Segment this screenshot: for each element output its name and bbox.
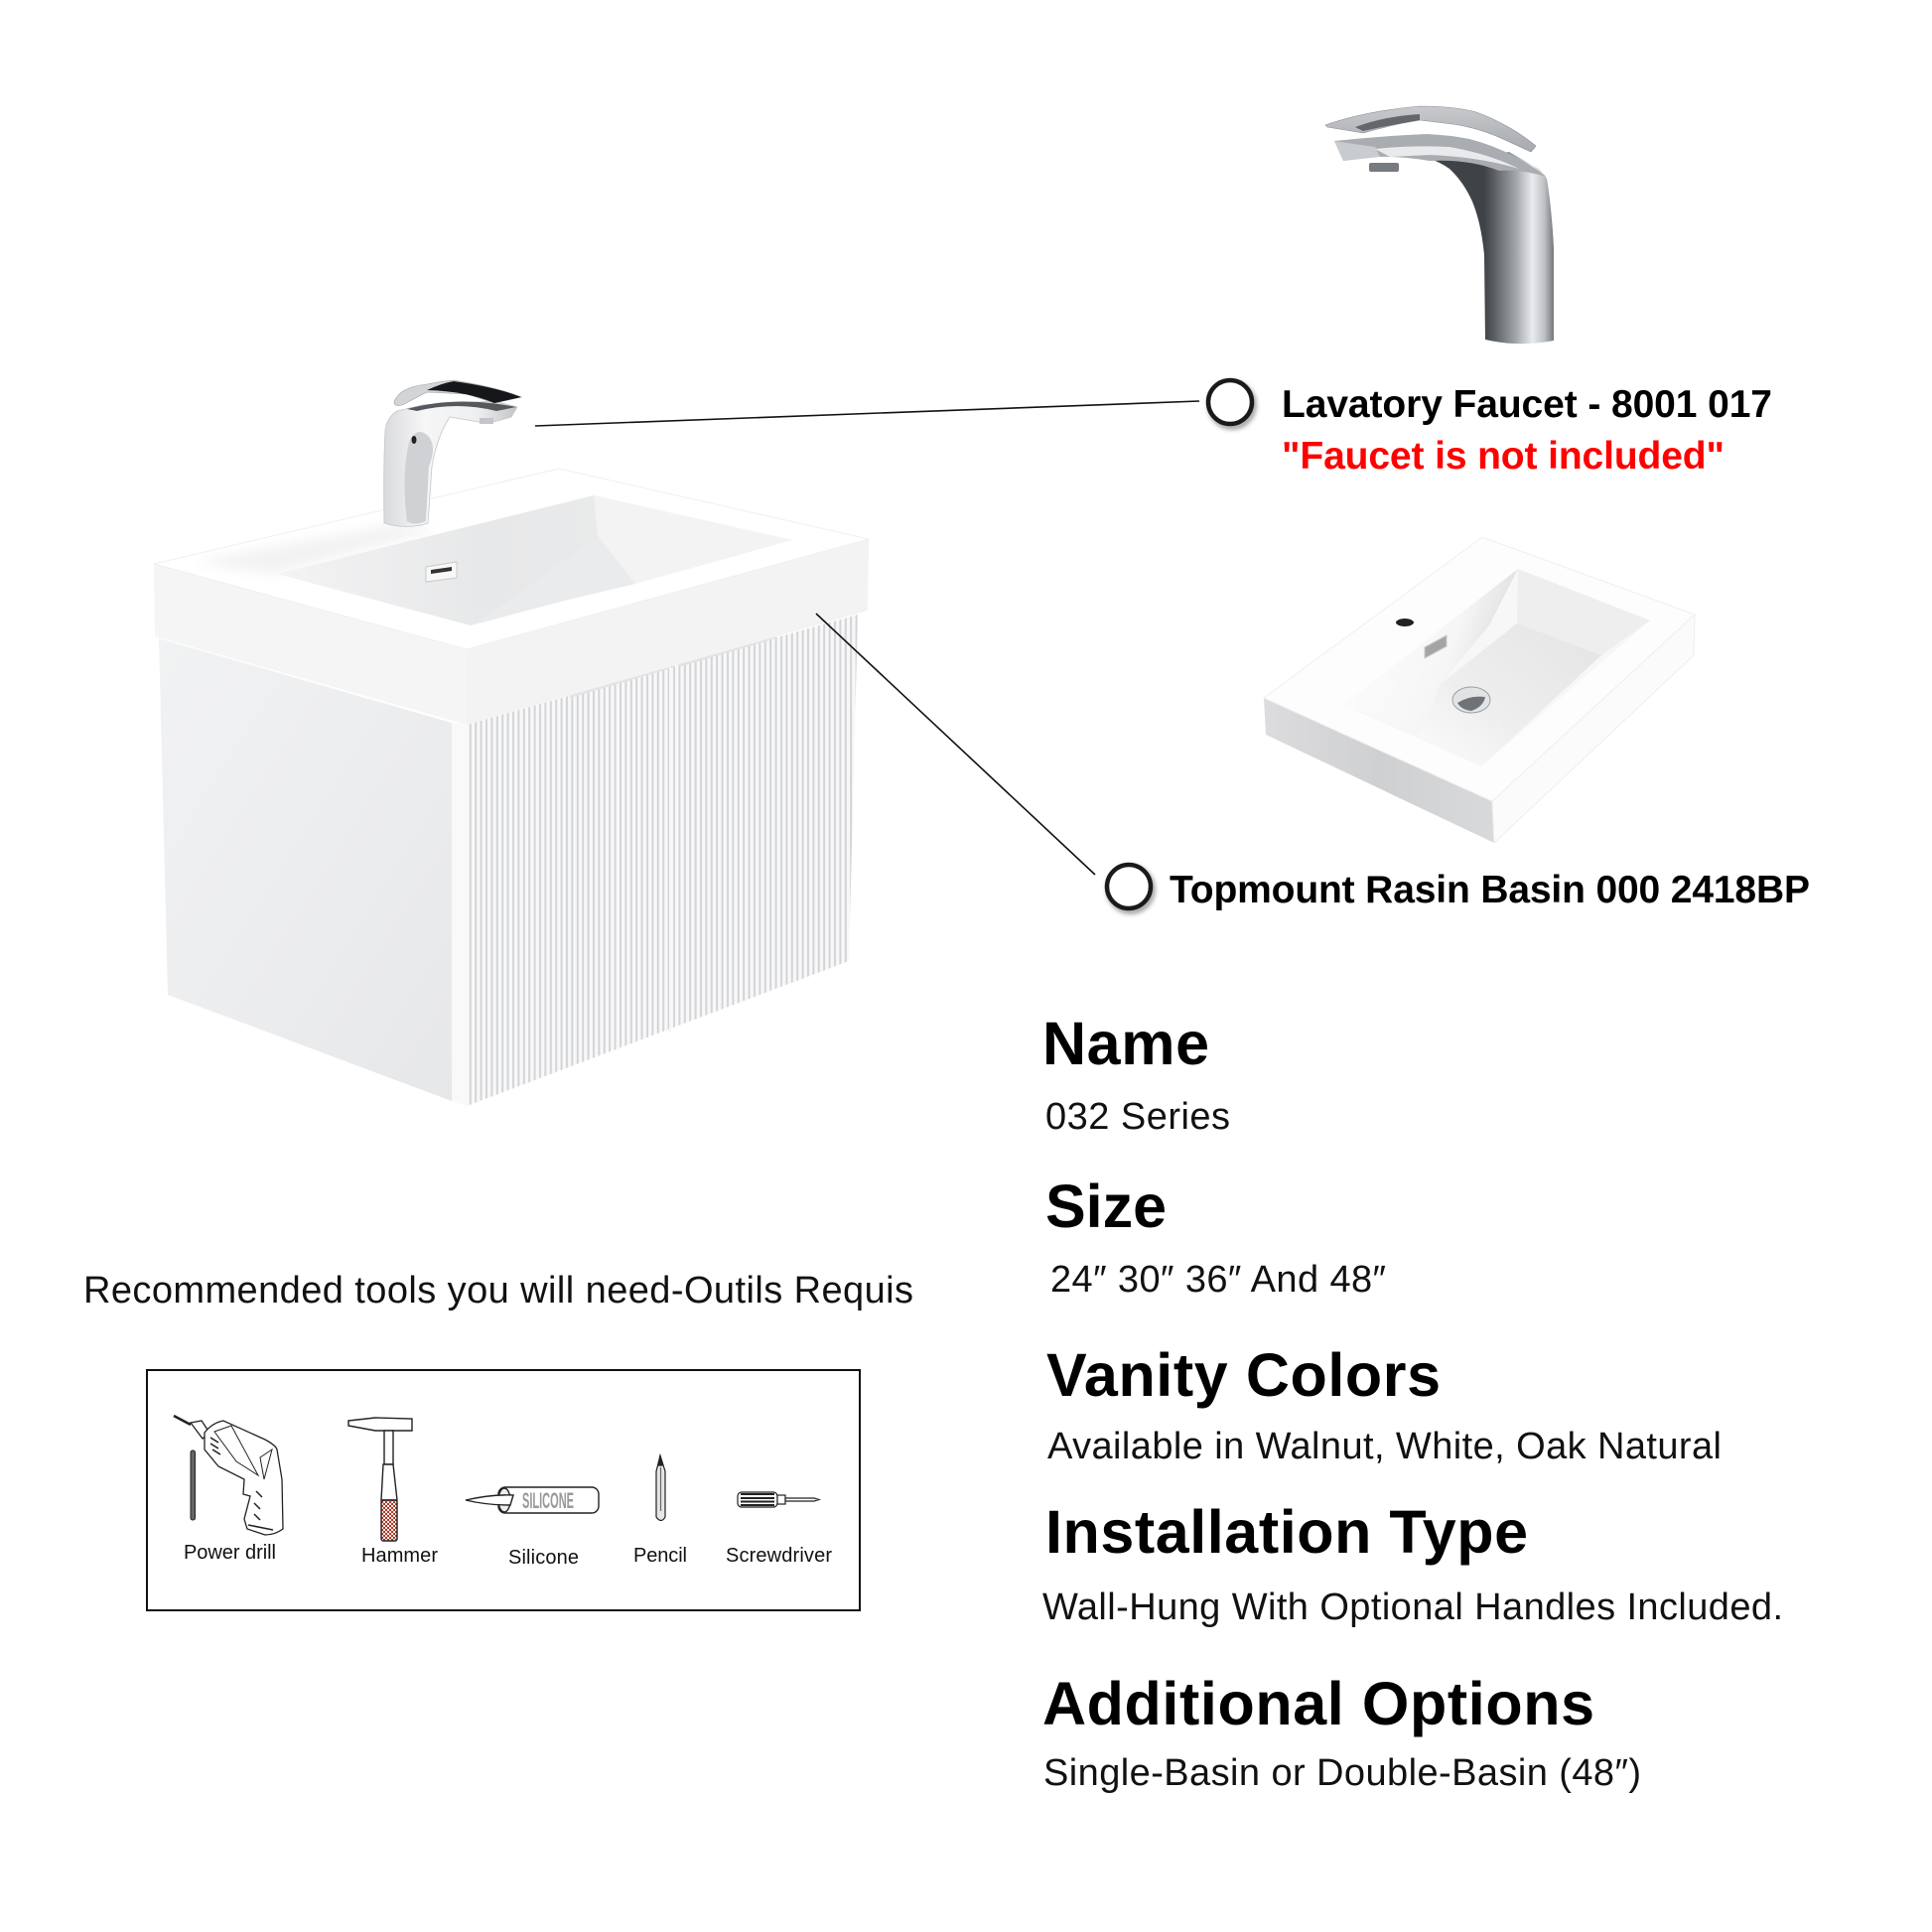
spec: size bbox=[1045, 1173, 1386, 1301]
basin overflow bbox=[1425, 635, 1447, 658]
small faucet on vanity bbox=[384, 380, 521, 526]
basin back wall bbox=[1517, 569, 1650, 655]
label: lavatory faucet: Lavatory Faucet - 8001 017 bbox=[1282, 383, 1772, 426]
leader line to basin bbox=[816, 614, 1095, 875]
label: topmount basin: Topmount Rasin Basin 000 2418BP bbox=[1170, 869, 1810, 911]
spec: name: Name bbox=[1042, 1010, 1209, 1077]
faucet body bbox=[1430, 152, 1554, 344]
product photo: topmount basin bbox=[1264, 537, 1695, 843]
basin bowl bbox=[277, 495, 792, 625]
callout marker: faucet bbox=[1208, 380, 1254, 427]
icon: power drill bbox=[174, 1416, 283, 1535]
spec: additional options: Additional Options bbox=[1042, 1670, 1594, 1737]
leader line to faucet bbox=[535, 401, 1199, 426]
cabinet side panel bbox=[159, 638, 452, 1101]
spec: installation type bbox=[1042, 1498, 1783, 1628]
faucet aerator bbox=[1369, 163, 1399, 172]
drill bit bbox=[191, 1450, 195, 1520]
spec: additional options: Single-Basin or Double-Basin (48″) bbox=[1043, 1752, 1641, 1794]
cabinet corner trim bbox=[452, 723, 467, 1106]
callout marker: basin bbox=[1107, 865, 1153, 911]
spec: installation type: Wall-Hung With Optional Handles Included. bbox=[1042, 1587, 1783, 1628]
spec: vanity colors: Available in Walnut, White, Oak Natural bbox=[1047, 1426, 1722, 1467]
tool labels: Pencil bbox=[633, 1545, 687, 1567]
icon: silicone tube: SILICONE bbox=[522, 1488, 574, 1513]
basin front edge bbox=[154, 564, 467, 725]
fluted drawer fronts bbox=[467, 615, 858, 1106]
tool labels: Power drill bbox=[184, 1542, 276, 1564]
product photo: lavatory faucet bbox=[1325, 106, 1554, 344]
spec: name bbox=[1042, 1010, 1230, 1138]
overflow drain bbox=[426, 562, 457, 582]
spec: additional options bbox=[1042, 1670, 1641, 1794]
basin drain bbox=[1452, 687, 1490, 713]
faucet handle bbox=[1325, 106, 1536, 152]
spec: vanity colors bbox=[1046, 1341, 1722, 1467]
spec: size: Size bbox=[1045, 1173, 1167, 1240]
icon: silicone tube bbox=[466, 1487, 599, 1513]
icon: pencil bbox=[656, 1455, 665, 1521]
icon: hammer bbox=[348, 1418, 412, 1541]
faucet hole bbox=[1395, 618, 1415, 627]
spec: name: 032 Series bbox=[1045, 1096, 1230, 1138]
drawer handles bbox=[570, 633, 776, 1033]
basin top bbox=[154, 469, 869, 649]
illustration: wall-hung vanity with basin bbox=[154, 380, 869, 1106]
notice: faucet not included: "Faucet is not included" bbox=[1282, 435, 1725, 478]
spec: vanity colors: Vanity Colors bbox=[1046, 1341, 1441, 1409]
tool labels: Hammer bbox=[361, 1545, 438, 1567]
tool labels: Silicone bbox=[508, 1547, 579, 1569]
heading: tools: Recommended tools you will need-Outils Requis bbox=[83, 1270, 913, 1311]
tool labels bbox=[184, 1542, 832, 1569]
tool labels: Screwdriver bbox=[726, 1545, 832, 1567]
icon: screwdriver bbox=[738, 1492, 819, 1507]
spec: size: 24″ 30″ 36″ And 48″ bbox=[1050, 1259, 1386, 1301]
basin bowl left slope bbox=[1343, 569, 1518, 735]
basin floor bbox=[1420, 623, 1601, 766]
panel: recommended tools bbox=[147, 1370, 860, 1610]
spec: installation type: Installation Type bbox=[1045, 1498, 1528, 1566]
faucet spout bbox=[1334, 134, 1547, 177]
